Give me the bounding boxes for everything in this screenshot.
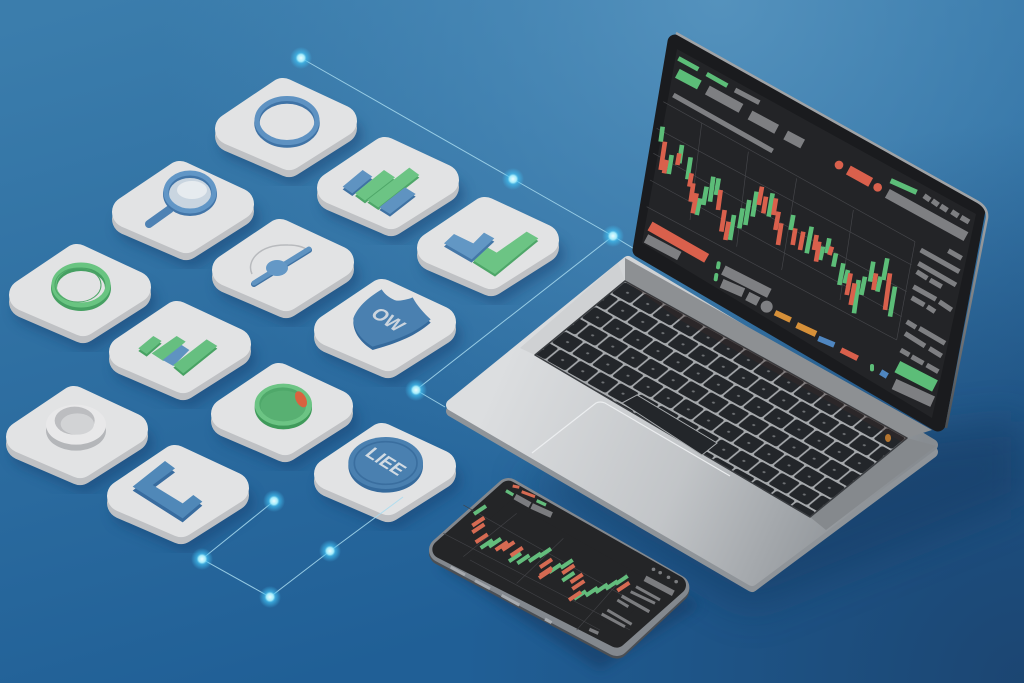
red alert badges [835,161,882,192]
laptop base [452,258,936,586]
tile: green ring icon [25,260,140,334]
tile: green bars icon [125,317,240,391]
upper right labels [887,181,969,237]
laptop [452,33,987,586]
phone body [442,490,677,646]
panel: icon tile grid [22,94,548,535]
tile: magnifier icon [128,173,243,251]
right side order list [901,250,962,372]
tile: green dial icon [227,379,342,453]
laptop lid [640,33,987,428]
coin label: LIEE [361,444,411,479]
phone candlestick chart [472,506,629,600]
phone top bars [506,486,552,515]
dial marker [293,389,309,409]
shadow: phone [440,505,700,670]
smartphone [442,486,677,646]
tile: L bracket icon [123,461,238,535]
tile: gauge icon [228,235,343,309]
phone side buttons [451,567,552,623]
tile: blue ring icon [231,94,346,168]
tile: stacked bars icon [333,153,448,227]
phone chart grid [443,505,637,630]
glowing nodes [191,47,624,608]
keyboard [535,281,907,517]
tile: shield icon [330,289,445,369]
tile: white ring icon [22,402,137,476]
screen dashboard [646,58,969,402]
bottom indicator row [761,301,887,376]
tile: LIEE coin icon [330,437,445,513]
shield label: OW [365,305,410,336]
top status bars [673,58,803,151]
tile: blue and green steps icon [433,213,548,287]
lower left order bars [646,226,769,302]
lower right action buttons [894,367,935,402]
connector lines [202,58,636,597]
phone right list [589,569,676,633]
candlestick chart [661,127,895,317]
shadow: laptop [520,420,1024,610]
trackpad [532,402,730,476]
key indicator [885,434,891,442]
chart grid [647,102,915,340]
